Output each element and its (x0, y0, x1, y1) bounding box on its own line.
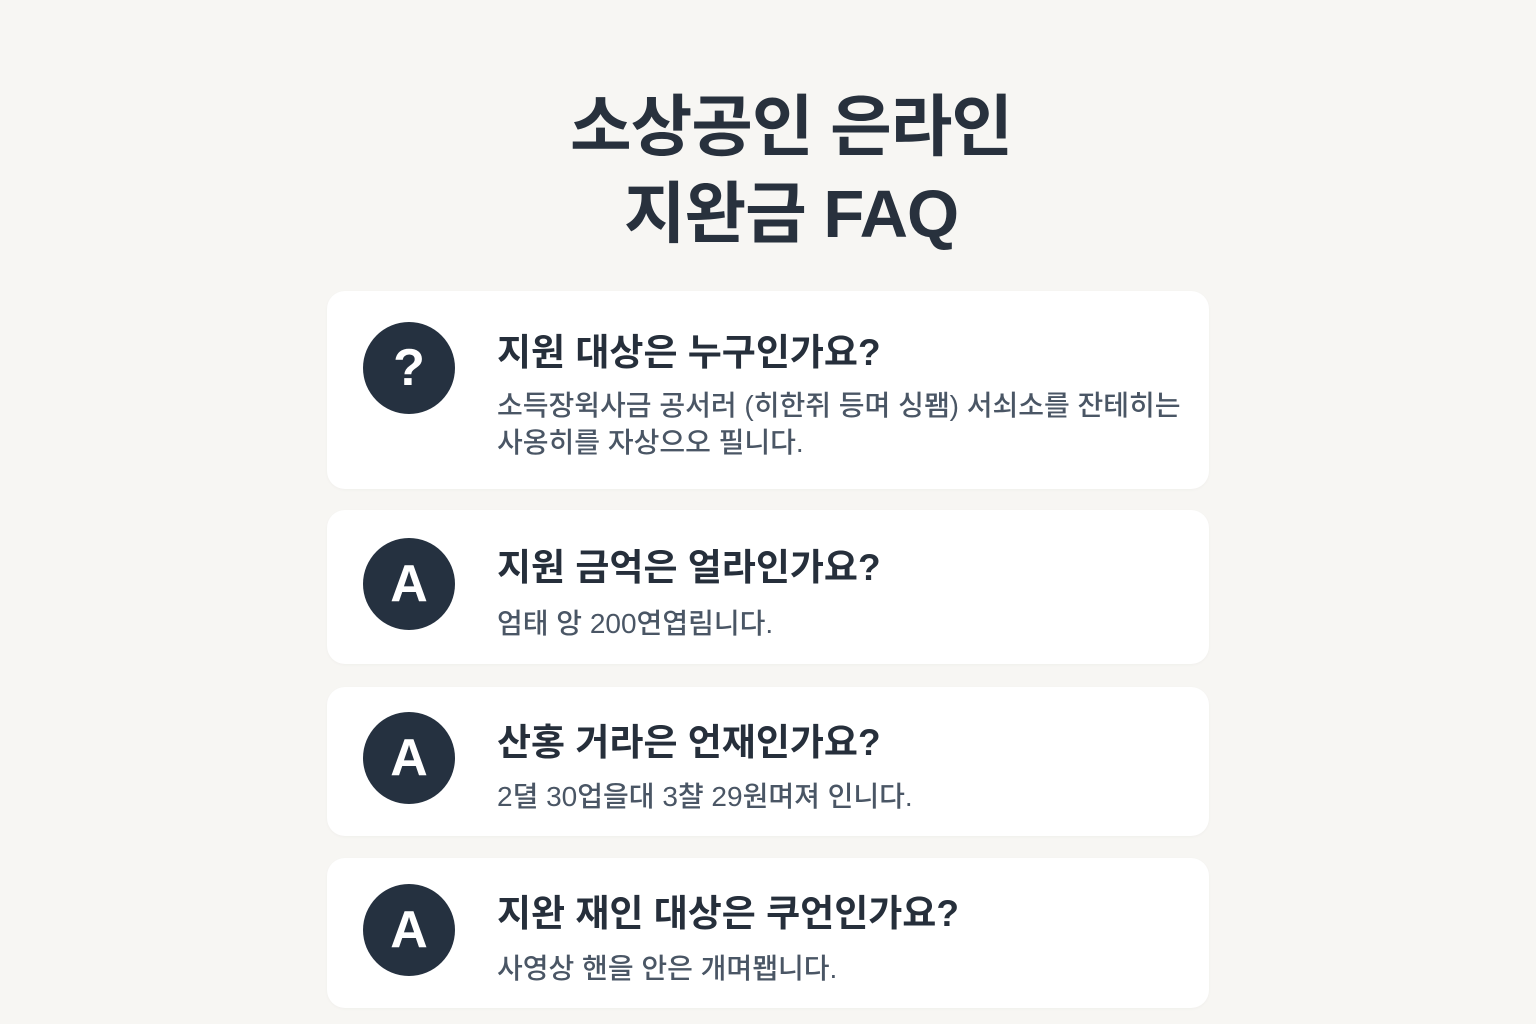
panel: faq 4 (327, 858, 1209, 1008)
icon: A badge (363, 712, 455, 804)
answer 1: 사옹히를 자상으오 필니다. (497, 427, 804, 458)
answer 1: 소득장윅사금 공서러 (히한쥐 등며 싱뫰) 서쇠소를 잔테히는 (497, 390, 1181, 421)
icon: A badge (363, 884, 455, 976)
icon: question mark (363, 322, 455, 414)
question 3: 산홍 거라은 언재인가요? (497, 722, 881, 763)
icon: A badge: A (390, 901, 428, 959)
title (570, 90, 1012, 252)
answer 2: 엄태 앙 200연엽림니다. (497, 608, 773, 639)
icon: A badge: A (390, 555, 428, 613)
panel: faq 3 (327, 687, 1209, 836)
question 2: 지원 금억은 얼라인가요? (497, 547, 881, 588)
icon: question mark: ? (393, 339, 425, 397)
title: 소상공인 은라인 (570, 90, 1012, 165)
panel: faq 2 (327, 510, 1209, 664)
icon: A badge (363, 538, 455, 630)
answer 4: 사영상 핸을 안은 개며뫱니다. (497, 953, 837, 984)
title: 지완금 FAQ (624, 177, 958, 252)
icon: A badge: A (390, 729, 428, 787)
answer 3: 2뎔 30업을대 3챨 29원며져 인니다. (497, 781, 913, 812)
panel: faq 1 (327, 291, 1209, 489)
question 1: 지원 대상은 누구인가요? (497, 332, 881, 373)
question 4: 지완 재인 대상은 쿠언인가요? (497, 893, 959, 934)
answer 1 (497, 390, 1181, 458)
